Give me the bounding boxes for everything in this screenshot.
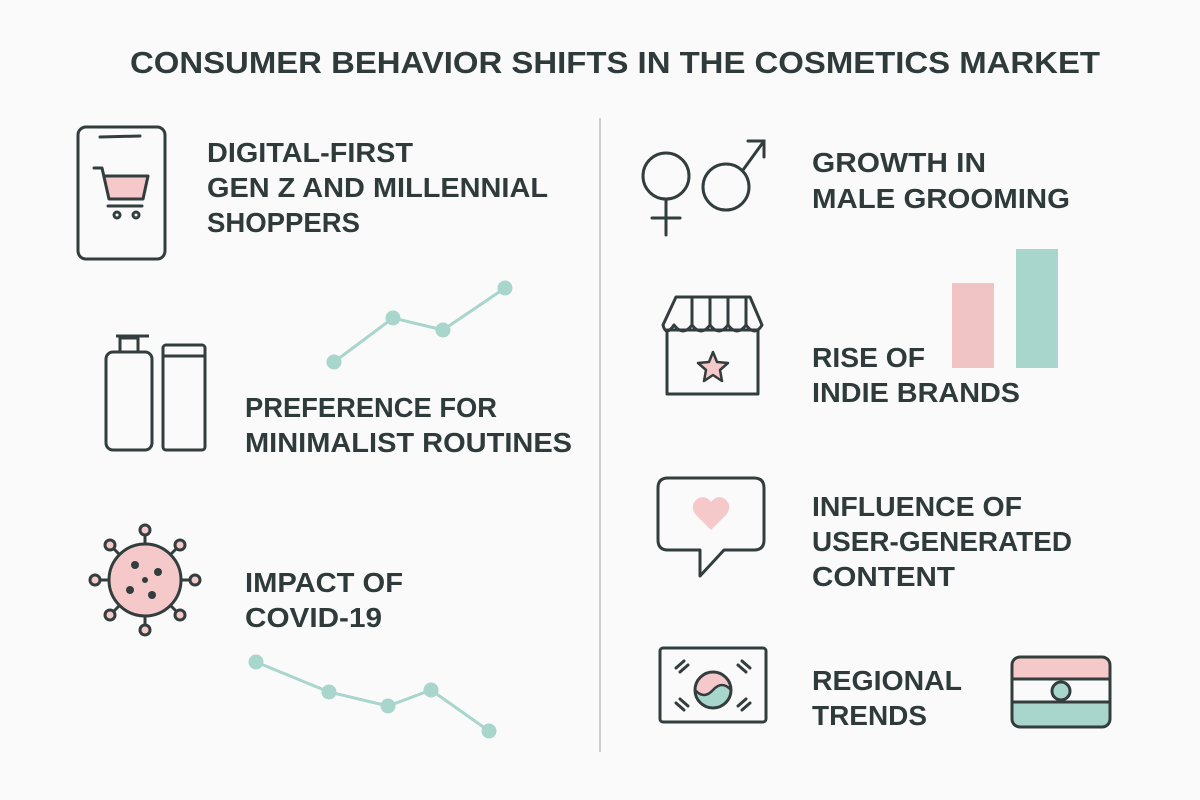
text: minimalist: PREFERENCE FOR	[245, 392, 497, 423]
icon: store	[663, 297, 762, 394]
text: UGC: INFLUENCE OF	[812, 491, 1022, 522]
text: UGC: CONTENT	[812, 561, 955, 592]
text: UGC	[812, 491, 1072, 592]
text: indie brands: RISE OF	[812, 342, 925, 373]
text: minimalist: MINIMALIST ROUTINES	[245, 427, 572, 458]
chart: falling line	[250, 656, 495, 737]
text: minimalist	[245, 392, 572, 458]
text: covid	[245, 567, 403, 633]
text: male grooming: MALE GROOMING	[812, 183, 1070, 214]
icon: speech bubble heart	[658, 478, 764, 576]
text: digital-first	[207, 137, 548, 238]
icon: phone with cart	[78, 127, 165, 259]
text: regional	[812, 665, 962, 731]
text: indie brands: INDIE BRANDS	[812, 377, 1020, 408]
icon: bottle and tube	[106, 336, 205, 450]
text: digital-first: DIGITAL-FIRST	[207, 137, 413, 168]
text: regional: REGIONAL	[812, 665, 962, 696]
text: covid: IMPACT OF	[245, 567, 403, 598]
text: male grooming: GROWTH IN	[812, 147, 986, 178]
icon: india flag	[1012, 657, 1110, 727]
icon: virus	[90, 525, 200, 635]
text: indie brands	[812, 342, 1020, 408]
title: CONSUMER BEHAVIOR SHIFTS IN THE COSMETICS MARKET	[130, 45, 1100, 80]
text: digital-first: GEN Z AND MILLENNIAL	[207, 172, 548, 203]
text: male grooming	[812, 147, 1070, 214]
icon: korea flag	[660, 648, 766, 722]
chart: bars	[952, 249, 1058, 368]
text: covid: COVID-19	[245, 602, 382, 633]
icon: gender symbols	[643, 141, 764, 235]
text: UGC: USER-GENERATED	[812, 526, 1072, 557]
text: regional: TRENDS	[812, 700, 927, 731]
chart: rising line	[328, 282, 511, 368]
text: digital-first: SHOPPERS	[207, 207, 360, 238]
